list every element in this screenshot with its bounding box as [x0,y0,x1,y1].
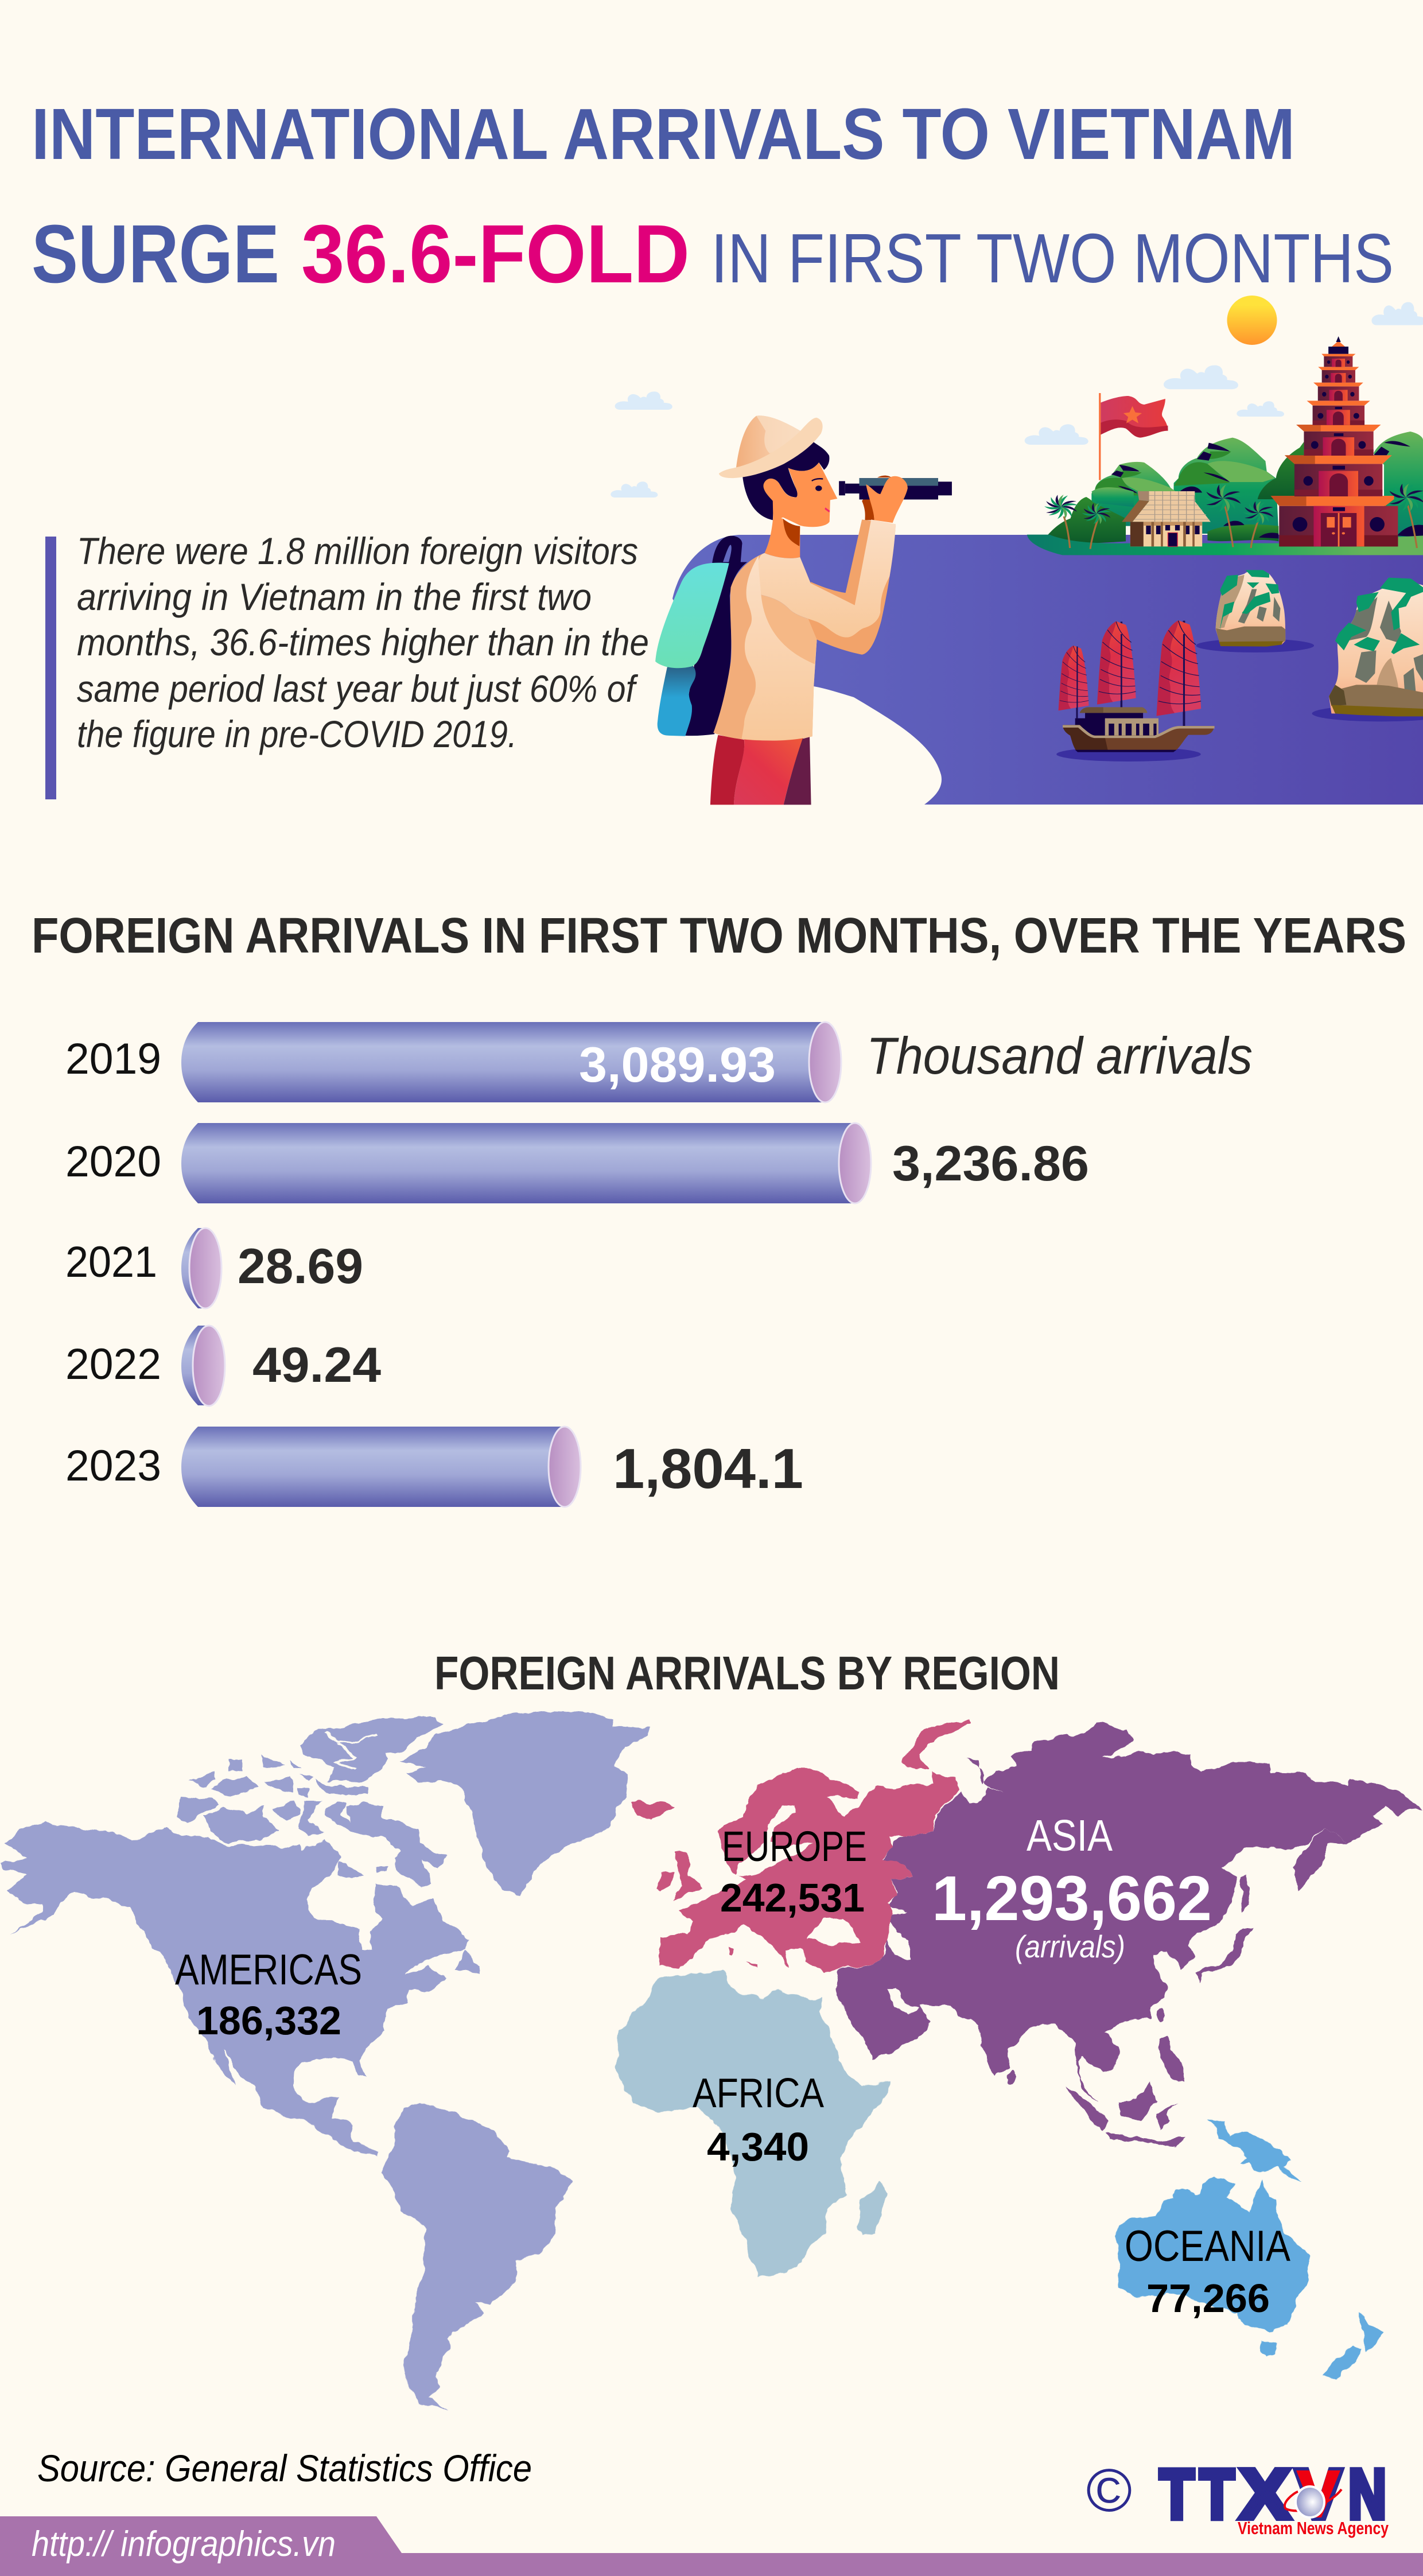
palms [1044,483,1423,549]
intro paragraph: same period last year but just 60% of [77,667,639,710]
logo tagline: Vietnam News Agency [1238,2518,1389,2538]
section heading: map: FOREIGN ARRIVALS BY REGION [434,1646,1060,1700]
bar 2020: 3,236.86 [892,1136,1089,1191]
world map [0,1710,1423,2409]
intro paragraph: the figure in pre-COVID 2019. [77,713,517,755]
title line 2: SURGE [32,208,279,300]
bar 2019: 3,089.93 [579,1038,776,1093]
bar 2019: 2019 [65,1035,161,1083]
torso [713,553,817,741]
telescope [839,478,952,499]
junk boat [1059,620,1215,752]
label: Oceania: OCEANIA [1125,2222,1290,2271]
bar 2019 [65,1022,1253,1102]
accent bar [45,537,56,799]
bar 2023 [65,1427,803,1507]
logo: TTXVN: T [1160,2455,1194,2533]
rear hand [862,476,892,520]
illustration: travel scene [611,296,1423,805]
region: Oceania [1115,2120,1385,2380]
label: Europe [720,1823,867,1920]
bar 2020 [65,1123,1089,1203]
logo: TTXVN [1160,2455,1389,2538]
label: Europe: 242,531 [720,1875,865,1920]
title line 1: INTERNATIONAL ARRIVALS TO VIETNAM [32,94,1295,174]
bay [672,535,1423,805]
island with hills, house and pagoda [1027,336,1423,555]
stilt house [1122,491,1211,546]
face [763,463,837,527]
traveller with telescope [655,415,952,805]
title highlight: 36.6-FOLD [301,208,690,300]
intro text block [45,530,649,799]
bar 2019: Thousand arrivals [866,1027,1253,1085]
website link: http:// infographics.vn [32,2524,336,2564]
neck [764,516,800,558]
label: Oceania: 77,266 [1146,2276,1270,2321]
bar 2020: 2020 [65,1137,161,1186]
bar 2021 [65,1228,363,1308]
intro paragraph: arriving in Vietnam in the first two [77,576,592,618]
label: Africa: 4,340 [707,2124,809,2169]
intro paragraph: There were 1.8 million foreign visitors [77,530,638,572]
bar 2022: 2022 [65,1340,161,1389]
label: Asia [932,1811,1212,1964]
source note: Source: General Statistics Office [37,2447,532,2489]
logo: TTXVN: V [1296,2455,1342,2533]
clouds [611,302,1423,498]
island base [1027,535,1423,555]
bar 2023: 2023 [65,1442,161,1490]
region: Americas [0,1710,650,2409]
rock small [1216,570,1285,647]
junk boat and limestone rocks [1056,570,1423,761]
front hand [866,476,908,523]
bar 2021: 28.69 [238,1239,363,1294]
label: Americas: AMERICAS [175,1945,362,1994]
region: Asia [835,1722,1423,2147]
footer band [0,2516,1423,2576]
raised arm [759,519,896,655]
label: Americas [175,1945,362,2043]
rock large [1329,578,1423,716]
globe [1285,2485,1342,2519]
logo: TTXVN: N [1348,2455,1386,2533]
copyright mark: © [1086,2457,1132,2524]
label: Africa: AFRICA [693,2070,824,2116]
region: Europe [631,1719,972,1971]
backpack [655,536,747,736]
bar 2021: 2021 [65,1238,157,1287]
trousers [710,735,811,805]
logo: TTXVN: T [1200,2455,1234,2533]
pagoda [1271,336,1398,546]
flag [1099,393,1168,480]
red V accent [1296,2470,1340,2517]
intro paragraph [77,530,649,755]
region: Africa [615,1970,891,2277]
bar 2022: 49.24 [252,1338,381,1393]
hair [742,442,829,520]
label: Americas: 186,332 [196,1998,341,2043]
hat brim [719,418,823,478]
label: Asia: ASIA [1027,1811,1113,1860]
hills [1045,432,1423,543]
label: Africa [693,2070,824,2169]
land masses [0,1710,1423,2409]
sun [1227,296,1277,345]
label: Asia: 1,293,662 [932,1863,1212,1934]
label: Asia: (arrivals) [1015,1929,1125,1964]
bar chart [65,1022,1253,1507]
bar 2022 [65,1326,381,1406]
title [32,94,1394,300]
bar 2023: 1,804.1 [613,1437,803,1500]
water shadows [1056,639,1423,761]
intro paragraph: months, 36.6-times higher than in the [77,621,649,663]
logo: TTXVN: X [1240,2455,1290,2533]
hat [736,415,800,468]
label: Oceania [1125,2222,1290,2321]
label: Europe: EUROPE [722,1823,867,1870]
